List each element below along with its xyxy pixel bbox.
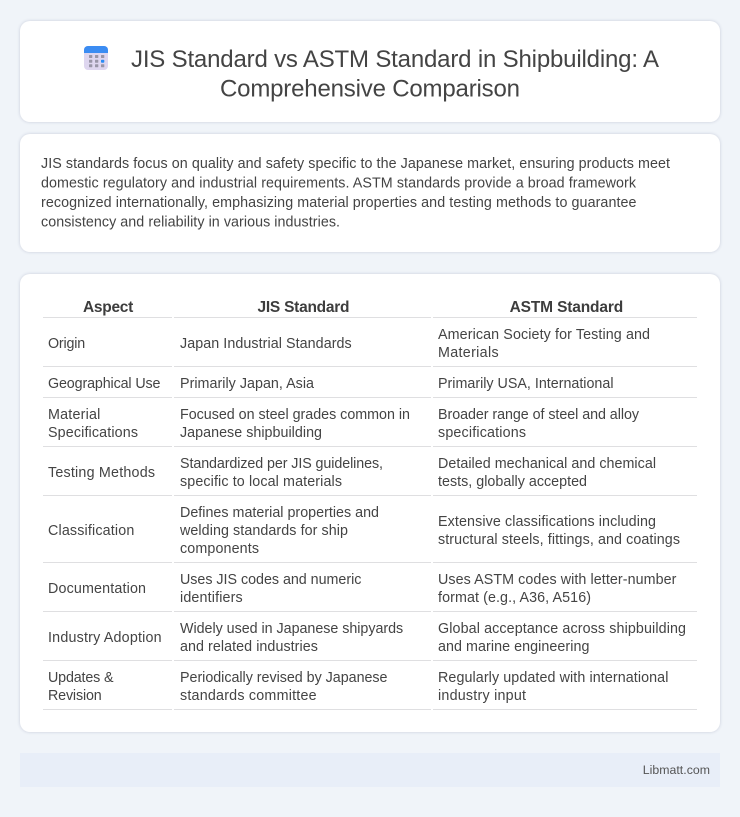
row: Industry Adoption: Global acceptance across shipbuilding (438, 621, 686, 637)
row: Origin: American Society for Testing and (438, 327, 650, 343)
row: Testing Methods: Detailed mechanical and chemical (438, 456, 656, 472)
row: Industry Adoption: and related industries (180, 639, 318, 655)
row: Updates & Revision: Regularly updated with international (438, 670, 668, 686)
row: Material Specifications: Focused on steel grades common in (180, 407, 410, 423)
row: Geographical Use: Geographical Use (48, 376, 161, 392)
row: Testing Methods: tests, globally accepted (438, 474, 587, 490)
column headers (83, 299, 623, 316)
intro paragraph: domestic regulatory and industrial requirements. ASTM standards provide a broad framework (41, 176, 637, 192)
row: Documentation: format (e.g., A36, A516) (438, 590, 591, 606)
row: Updates & Revision: industry input (438, 688, 526, 704)
intro paragraph: JIS standards focus on quality and safety specific to the Japanese market, ensuring products meet (41, 156, 670, 172)
intro paragraph: recognized internationally, emphasizing material properties and testing methods to guarantee (41, 195, 637, 211)
row: Classification: Extensive classifications including (438, 514, 656, 530)
row: Material Specifications: Broader range of steel and alloy (438, 407, 640, 423)
column headers: JIS Standard (258, 299, 350, 316)
column headers: ASTM Standard (510, 299, 623, 316)
row: Updates & Revision: Revision (48, 688, 102, 704)
row: Origin: Japan Industrial Standards (180, 336, 352, 352)
row: Classification: Defines material properties and (180, 505, 379, 521)
row: Documentation: Uses ASTM codes with letter-number (438, 572, 677, 588)
row: Documentation: identifiers (180, 590, 243, 606)
row: Material Specifications: Japanese shipbuilding (180, 425, 322, 441)
title: Comprehensive Comparison (220, 76, 520, 102)
footer credit: Libmatt.com (643, 763, 710, 777)
row: Material Specifications: Specifications (48, 425, 138, 441)
title (131, 46, 659, 102)
row: Documentation (48, 572, 677, 606)
row: Origin: Origin (48, 336, 85, 352)
row: Material Specifications (48, 407, 640, 441)
comparison table panel (20, 274, 720, 732)
row: Updates & Revision (48, 670, 668, 704)
title: JIS Standard vs ASTM Standard in Shipbuilding: A (131, 46, 659, 73)
intro paragraph: consistency and reliability in various industries. (41, 214, 340, 230)
row: Classification (48, 505, 680, 557)
footer bar (20, 753, 720, 787)
row: Classification: Classification (48, 523, 134, 539)
row: Testing Methods: Testing Methods (48, 465, 155, 481)
row: Industry Adoption: Industry Adoption (48, 630, 162, 646)
row: Updates & Revision: Updates & (48, 670, 114, 686)
row: Origin: Materials (438, 345, 499, 361)
icon: calendar (84, 46, 108, 70)
row: Updates & Revision: Periodically revised by Japanese (180, 670, 388, 686)
row: Classification: structural steels, fittings, and coatings (438, 532, 680, 548)
row: Origin (48, 327, 650, 361)
row: Testing Methods: specific to local materials (180, 474, 342, 490)
row: Material Specifications: specifications (438, 425, 526, 441)
row: Testing Methods (48, 456, 656, 490)
row: Classification: welding standards for ship (179, 523, 348, 539)
row: Industry Adoption: and marine engineering (438, 639, 589, 655)
row: Geographical Use: Primarily Japan, Asia (180, 376, 314, 392)
row: Updates & Revision: standards committee (180, 688, 317, 704)
row: Industry Adoption (48, 621, 686, 655)
row: Documentation: Documentation (48, 581, 146, 597)
row: Material Specifications: Material (48, 407, 100, 423)
row: Geographical Use: Primarily USA, International (438, 376, 614, 392)
column headers: Aspect (83, 299, 133, 316)
row: Documentation: Uses JIS codes and numeric (180, 572, 361, 588)
intro paragraph (41, 156, 670, 230)
intro text panel (20, 134, 720, 252)
row: Testing Methods: Standardized per JIS guidelines, (180, 456, 383, 472)
title card (20, 21, 720, 122)
row: Classification: components (180, 541, 259, 557)
row: Geographical Use (48, 376, 614, 392)
row: Industry Adoption: Widely used in Japanese shipyards (180, 621, 403, 637)
